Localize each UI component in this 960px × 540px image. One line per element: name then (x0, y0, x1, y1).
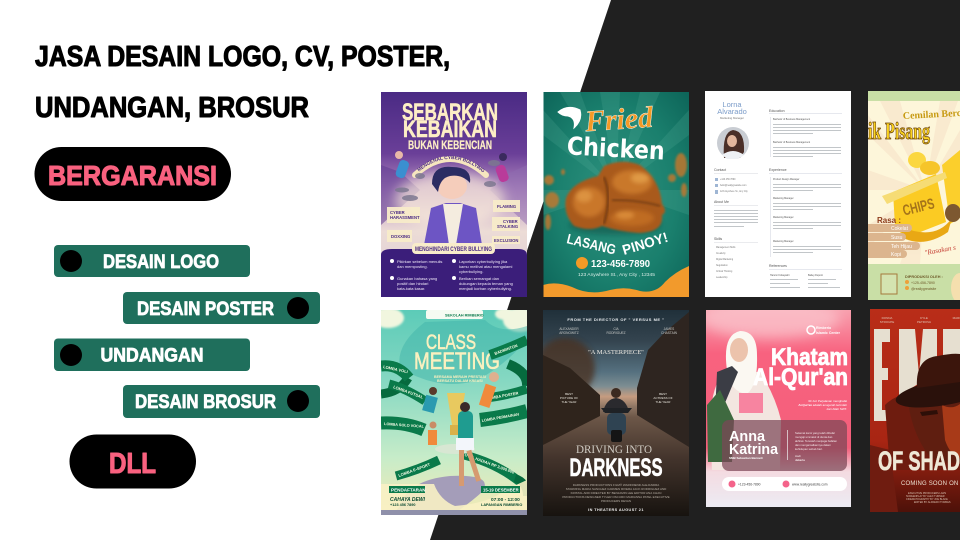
producer footer: DIPRODUKSI OLEH : (905, 275, 943, 279)
bottom info panel: cyberbullying. (459, 269, 483, 274)
info panel: 15-19 DESEMBER (483, 488, 519, 492)
heading: Cemilan Berc (903, 108, 960, 122)
right column: Marketing Manager (773, 216, 794, 219)
school tag: SEKOLAH RIMBERIO (445, 314, 484, 318)
glass panel: Hadi (795, 454, 801, 458)
poster: fried chicken (544, 92, 689, 297)
glass panel: kehidupan sehari-hari. (795, 447, 823, 451)
award laurels: PICTURE OF (560, 396, 578, 400)
orange wave (543, 266, 689, 297)
bottom info panel: kamu melihat atau mengalami (459, 264, 512, 269)
crumbs (544, 153, 687, 230)
film title (570, 442, 662, 482)
credits block: CINEMATOGRAPHY BY JOE BLAKE (906, 498, 948, 501)
bottom info panel: Pikirkan sebelum menulis (397, 259, 442, 264)
poster heading (402, 99, 498, 152)
flavour list: Cokelat (891, 226, 909, 232)
clouds (372, 308, 537, 332)
credits block: EXECUTIVE PRODUCERS LARS (908, 492, 946, 495)
glass panel: Anna (729, 429, 766, 445)
info panel: 07:00 - 12:00 (491, 497, 520, 503)
slogan: LASANG (565, 230, 618, 258)
ribbon labels: LOMBA VOLI (383, 364, 408, 374)
contact pill: +123-456-7890 (738, 482, 761, 486)
class meeting heading: BERSATU DALAM KREASI (437, 379, 483, 383)
heading: ik Pisang (868, 119, 930, 145)
side label text: HARASSMENT (390, 215, 420, 220)
info panel: +123 456 7890 (390, 503, 415, 507)
right column: Harumi Kobayashi (770, 274, 790, 277)
poster: sebarkan kebaikan (381, 92, 527, 297)
side labels (387, 200, 520, 244)
bottom info panel: Laporkan cyberbullying jika (459, 259, 508, 264)
right column: Bailey Dupont (808, 274, 823, 277)
name: Marketing Manager (720, 116, 744, 120)
credits: STROUPE (880, 320, 894, 324)
left column: Creativity (716, 252, 726, 255)
side label text: EXCLUSION (494, 238, 518, 243)
film synopsis: STARRING MARIA SANCHEZ CARMEN RIVERA JACK RODRIGUEZ AND (566, 487, 667, 491)
glass panel: mengaji ummatul di dunia dan (795, 435, 833, 439)
ribbon labels: LOMBA PERMAINAN (481, 412, 520, 423)
ribbon labels (383, 343, 520, 478)
bottom info panel: dukungan kepada teman yang (459, 281, 513, 286)
ribbon labels: TOTAL HADIAH RP 3.000.000 (462, 451, 516, 475)
left column: Skills (714, 237, 722, 241)
intro text (798, 399, 847, 411)
poster heading: BUKAN KEBENCIAN (408, 138, 492, 152)
poster: empire of shadows (870, 309, 960, 512)
button: desain logo (54, 245, 250, 277)
button: desain logo: DESAIN LOGO (103, 251, 219, 273)
title: UNDANGAN, BROSUR (35, 92, 309, 124)
button: desain poster: DESAIN POSTER (137, 298, 274, 320)
right column (769, 109, 842, 288)
credits (880, 316, 960, 324)
title (35, 41, 450, 124)
top credits: FROM THE DIRECTOR OF " VERSUS ME " (567, 317, 665, 322)
contact pill (722, 477, 847, 491)
dark diagonal background (430, 0, 960, 540)
bridge walls and trees (535, 312, 689, 447)
top credits (559, 317, 678, 335)
left column: Negotiation (716, 264, 728, 267)
producer footer: @reallygreatsite (911, 287, 936, 291)
producer footer (868, 265, 960, 303)
glass panel: SMB Sebastian Bennett (729, 456, 763, 460)
award laurels: THE YEAR (562, 400, 577, 404)
badge: bergaransi (34, 147, 231, 201)
flavour list: Kopi (891, 252, 901, 258)
glass panel: akhirat. Terusiah menjaga hafalan (795, 439, 837, 443)
credits: PETROVA (917, 320, 931, 324)
left column: 123 Anywhere St., Any City (720, 190, 749, 193)
left column: Management Skills (716, 246, 736, 249)
film synopsis: PRODUCERS DEVAN (601, 499, 631, 503)
glass panel (722, 420, 847, 471)
bottom info panel: menjadi korban cyberbullying. (459, 286, 512, 291)
left column: hello@reallygreatsite.com (720, 184, 747, 187)
illustrated arch and debris: MENGENAL CYBER BULLYING (417, 156, 484, 172)
credits: KYLE (920, 316, 928, 320)
tagline: "Rasakan s (924, 244, 957, 257)
badge: bergaransi: BERGARANSI (48, 160, 217, 191)
button: desain brosur: DESAIN BROSUR (135, 391, 276, 413)
info panel: CAHAYA DEWI (390, 497, 426, 503)
award laurels: ACTRESS OF (653, 396, 673, 400)
credits block: SCREENPLAY BY ALEX TURNER (906, 495, 945, 498)
name (717, 100, 747, 120)
motorcycle rider (601, 388, 632, 442)
credits block (906, 492, 951, 504)
left column: Contact (714, 168, 726, 172)
class meeting heading (414, 331, 500, 383)
coming soon: COMING SOON ON (901, 481, 958, 487)
intro text: dari Allah SWT. (827, 407, 847, 411)
slogan (565, 229, 670, 258)
award laurels: THE YEAR (656, 400, 671, 404)
button: undangan: UNDANGAN (100, 344, 204, 366)
ribbon labels: BADMINTON (494, 343, 518, 356)
button: desain poster (123, 292, 320, 324)
phone (576, 257, 650, 270)
right column: Experience (769, 168, 787, 172)
left column: Critical Thinking (716, 270, 733, 273)
side label text: DOXXING (391, 234, 410, 239)
glass panel: Jakarta (795, 458, 805, 462)
class meeting heading: BERSAMA MERAIH PRESTASI (434, 375, 486, 379)
slogan: PINOY! (620, 229, 670, 258)
ribbon labels: LOMBA FUTSAL (393, 384, 424, 400)
bottom info panel: MENGHINDARI CYBER BULLYING (415, 247, 492, 253)
bottom info panel: positif dan hindari (397, 281, 428, 286)
glass panel: Selamat kami yang telah dihafal (795, 431, 835, 435)
intro text: 30 Juz Perjalanan menghafal (808, 399, 847, 403)
glass panel: dan mengamalkannya dalam (795, 443, 832, 447)
bottom info panel: Berikan semangat dan (459, 276, 499, 281)
phone: 123-456-7890 (591, 259, 650, 270)
class meeting heading: CLASS (426, 331, 476, 354)
credits: DONNA (882, 316, 892, 320)
badge: dll (70, 434, 196, 488)
chicken heading: Chicken (566, 131, 666, 166)
left column (714, 168, 758, 279)
top credits: CHASTAIN (661, 331, 678, 335)
right column: References (769, 264, 787, 268)
side label text: STALKING (497, 224, 518, 229)
left column: +123 456 7890 (720, 179, 736, 181)
chips bags: CHIPS (901, 195, 936, 220)
poster: cv resume (705, 91, 851, 297)
side label text (390, 204, 518, 243)
film title: DRIVING INTO (576, 442, 652, 456)
badge: dll: DLL (109, 448, 156, 480)
right column: Product Design Manager (773, 178, 800, 181)
bottom info panel: kata-kata kasar. (397, 286, 425, 291)
flavour list: Teh Hijau (891, 244, 912, 250)
credits block: EDITED BY ALFREDO TORRES (914, 501, 951, 504)
poster: khatam al-quran (706, 310, 851, 507)
right column: Education (769, 109, 785, 113)
title: JASA DESAIN LOGO, CV, POSTER, (35, 41, 450, 73)
trophy and athletes (422, 372, 499, 486)
poster: class meeting (381, 310, 527, 515)
top credits: CIA (613, 327, 620, 331)
school tag (426, 310, 484, 319)
fried chicken pieces (565, 162, 665, 235)
left column: Leadership (716, 276, 728, 279)
info panel: LAPANGAN RIMBERIO (481, 503, 522, 507)
film synopsis: DARKNESS PRODUCTIONS FILM® WARFRIEND ALEJANDRA (573, 483, 659, 487)
award laurels (560, 392, 673, 404)
side label text: CYBER (390, 210, 405, 215)
button: undangan (54, 338, 250, 371)
top credits: RODRIGUEZ (606, 331, 626, 335)
top credits: ALEXANDER (559, 327, 579, 331)
producer footer: +125-456-7890 (911, 281, 935, 285)
bottom info panel: dan memposting. (397, 264, 428, 269)
photo (717, 127, 749, 159)
masterpiece quote: "A MASTERPIECE" (588, 349, 644, 356)
man in hat (870, 354, 960, 512)
ribbon labels: LOMBA SOLO VOCAL (384, 422, 425, 429)
right column: Bachelor of Business Management (773, 141, 810, 144)
left column: Digital Marketing (716, 258, 734, 261)
info panel (381, 480, 527, 515)
info panel: PENDAFTARAN (391, 488, 426, 492)
top credits: JAMES (664, 327, 674, 331)
poster heading: KEBAIKAN (403, 116, 497, 143)
road (392, 476, 485, 515)
logo: Islamic Center (816, 331, 841, 335)
right column: Marketing Manager (773, 197, 794, 200)
top credits: ARONOWITZ (559, 331, 579, 335)
logo (558, 107, 581, 128)
illustrated character (424, 167, 482, 245)
poster: driving into darkness (543, 310, 689, 516)
student photo (707, 331, 781, 470)
flavour list: Rasa : (877, 216, 901, 225)
class meeting heading: MEETING (414, 348, 500, 375)
bottom info panel: Gunakan bahasa yang (397, 276, 437, 281)
bottom info panel (381, 243, 527, 297)
release date: IN THEATERS AUGUST 21 (588, 508, 644, 512)
logo (807, 326, 841, 335)
logo: Rimberio (816, 326, 831, 330)
side label text: FLAMING (497, 204, 516, 209)
ribbon labels: LOMBA E-SPORT (398, 462, 431, 478)
side label text: CYBER (503, 219, 518, 224)
film synopsis: PRODUCTIONS DESIGNER TYLER OSCURO MARIANNA PATEL EXECUTIVE (562, 495, 670, 499)
flavour list (860, 216, 920, 258)
left column: About Me (714, 200, 729, 204)
film synopsis (562, 483, 670, 503)
chips bags (882, 150, 960, 242)
contact pill: www.reallygreatsite.com (792, 482, 828, 486)
large title letters (874, 329, 960, 421)
award laurels: BEST (565, 392, 573, 396)
right column: Marketing Manager (773, 240, 794, 243)
film synopsis: KRISTAL ADD DIRECTED BY BENJAMIN LEE EDITOR ANA CHAN (571, 491, 661, 495)
poster: banana chips (868, 91, 960, 300)
glass panel: Katrina (729, 442, 779, 458)
name: Lorna (722, 100, 742, 109)
flavour list: Susu (891, 235, 903, 241)
right column: Bachelor of Business Management (773, 118, 810, 121)
ribbon labels: LOMBA POSTER (486, 390, 519, 401)
green ribbons (381, 340, 527, 496)
address: 123 Anywhere St., Any City , 12345 (578, 272, 655, 278)
fried script: Fried (583, 101, 655, 138)
heading (753, 344, 848, 391)
intro text: Al-Qur'an adalah anugerah terindah (798, 403, 847, 407)
illustrated arch and debris (395, 151, 509, 201)
name: Alvarado (717, 107, 747, 116)
button: desain brosur (123, 385, 320, 418)
award laurels: BEST (659, 392, 667, 396)
